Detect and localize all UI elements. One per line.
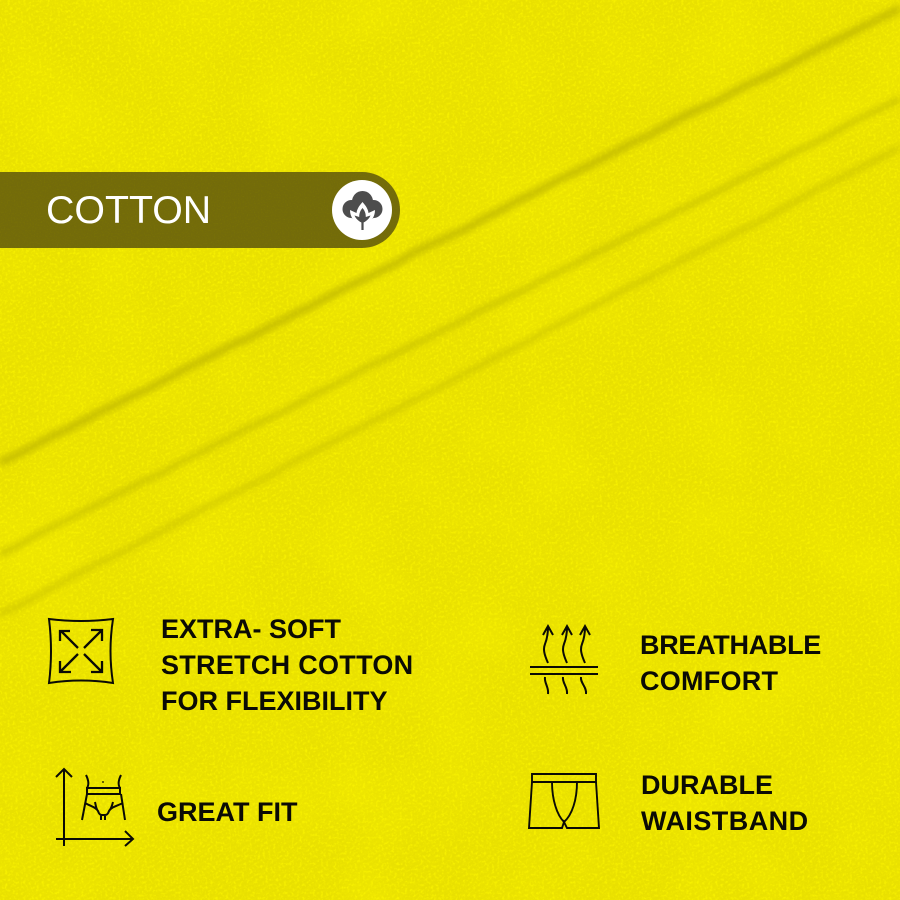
- banner title: COTTON: [46, 188, 211, 232]
- icon: boxer briefs: [528, 773, 600, 829]
- feature text: durable waistband: [641, 770, 809, 836]
- feature text: durable waistband: DURABLE: [641, 770, 773, 800]
- feature text: extra-soft stretch cotton: STRETCH COTTON: [161, 650, 413, 680]
- banner texture: [0, 172, 400, 248]
- icon: cotton boll: [332, 180, 392, 240]
- feature text: breathable comfort: BREATHABLE: [640, 630, 821, 660]
- feature text: extra-soft stretch cotton: EXTRA- SOFT: [161, 614, 341, 644]
- feature text: durable waistband: WAISTBAND: [641, 806, 809, 836]
- feature text: breathable comfort: COMFORT: [640, 666, 778, 696]
- icon: great fit body with axes: [55, 768, 134, 847]
- icon: breathable layers with rising air: [530, 624, 598, 694]
- feature text: breathable comfort: [640, 630, 821, 696]
- feature text: extra-soft stretch cotton: [161, 614, 413, 716]
- feature text: extra-soft stretch cotton: FOR FLEXIBILITY: [161, 686, 388, 716]
- icon: four-way stretch square: [48, 618, 114, 684]
- cotton banner: [0, 172, 400, 248]
- feature text: great fit: GREAT FIT: [157, 797, 297, 827]
